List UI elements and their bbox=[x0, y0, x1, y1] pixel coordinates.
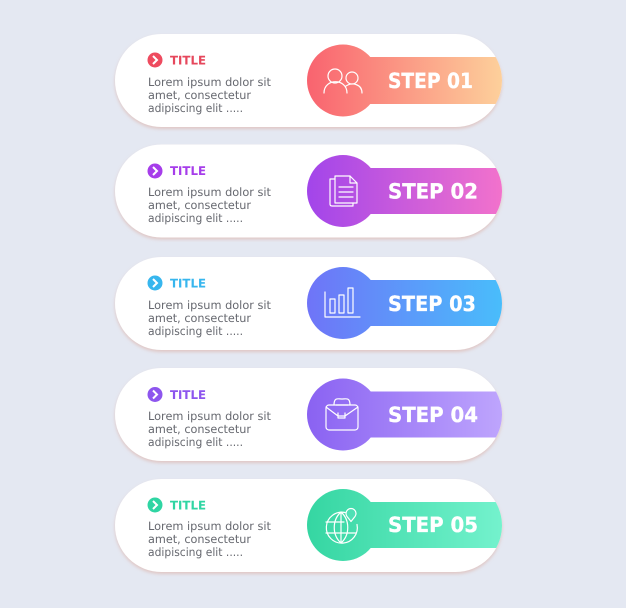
panel: step 03 bbox=[115, 257, 508, 350]
body text: adipiscing elit ..... bbox=[148, 101, 243, 115]
panel: step 01 bbox=[115, 34, 508, 127]
icon: bar chart bbox=[325, 288, 360, 317]
body text: Lorem ipsum dolor sit bbox=[148, 75, 271, 89]
title: TITLE bbox=[170, 498, 206, 512]
bullet icon bbox=[148, 387, 162, 402]
step 02 label: STEP 02 bbox=[388, 180, 478, 204]
panel: step 02 bbox=[115, 144, 508, 238]
body text: Lorem ipsum dolor sit bbox=[148, 298, 271, 312]
body text: Lorem ipsum dolor sit bbox=[148, 185, 271, 199]
step 01 label: STEP 01 bbox=[388, 69, 473, 93]
step 04 label: STEP 04 bbox=[388, 403, 478, 427]
bullet icon bbox=[148, 276, 162, 290]
bullet icon bbox=[148, 164, 162, 178]
step 02 banner bbox=[307, 155, 508, 227]
panel: step 04 bbox=[115, 368, 508, 461]
body text: amet, consectetur bbox=[148, 532, 251, 546]
bullet icon bbox=[148, 498, 162, 512]
body text: adipiscing elit ..... bbox=[148, 211, 243, 225]
step 05 banner bbox=[307, 489, 508, 561]
bullet icon bbox=[148, 52, 162, 68]
step 01 banner bbox=[307, 44, 508, 116]
icon: briefcase bbox=[326, 399, 358, 430]
step 04 banner bbox=[307, 378, 508, 450]
body text: amet, consectetur bbox=[148, 88, 251, 102]
body text bbox=[148, 519, 271, 559]
body text: adipiscing elit ..... bbox=[148, 545, 243, 559]
icon: globe with pin bbox=[326, 508, 357, 543]
panel: step 05 bbox=[115, 479, 508, 572]
body text bbox=[148, 75, 271, 115]
body text bbox=[148, 185, 271, 225]
body text bbox=[148, 298, 271, 338]
body text: Lorem ipsum dolor sit bbox=[148, 519, 271, 533]
icon: people bbox=[324, 69, 362, 93]
body text: amet, consectetur bbox=[148, 422, 251, 436]
body text: amet, consectetur bbox=[148, 311, 251, 325]
step 05 label: STEP 05 bbox=[388, 513, 478, 537]
step 03 label: STEP 03 bbox=[388, 292, 476, 316]
icon: documents bbox=[330, 176, 357, 206]
body text: Lorem ipsum dolor sit bbox=[148, 409, 271, 423]
body text: adipiscing elit ..... bbox=[148, 435, 243, 449]
body text: amet, consectetur bbox=[148, 198, 251, 212]
title: TITLE bbox=[170, 388, 206, 402]
title: TITLE bbox=[170, 276, 206, 290]
body text: adipiscing elit ..... bbox=[148, 324, 243, 338]
step 03 banner bbox=[307, 267, 508, 339]
title: TITLE bbox=[170, 164, 206, 178]
title: TITLE bbox=[170, 54, 206, 68]
body text bbox=[148, 409, 271, 449]
